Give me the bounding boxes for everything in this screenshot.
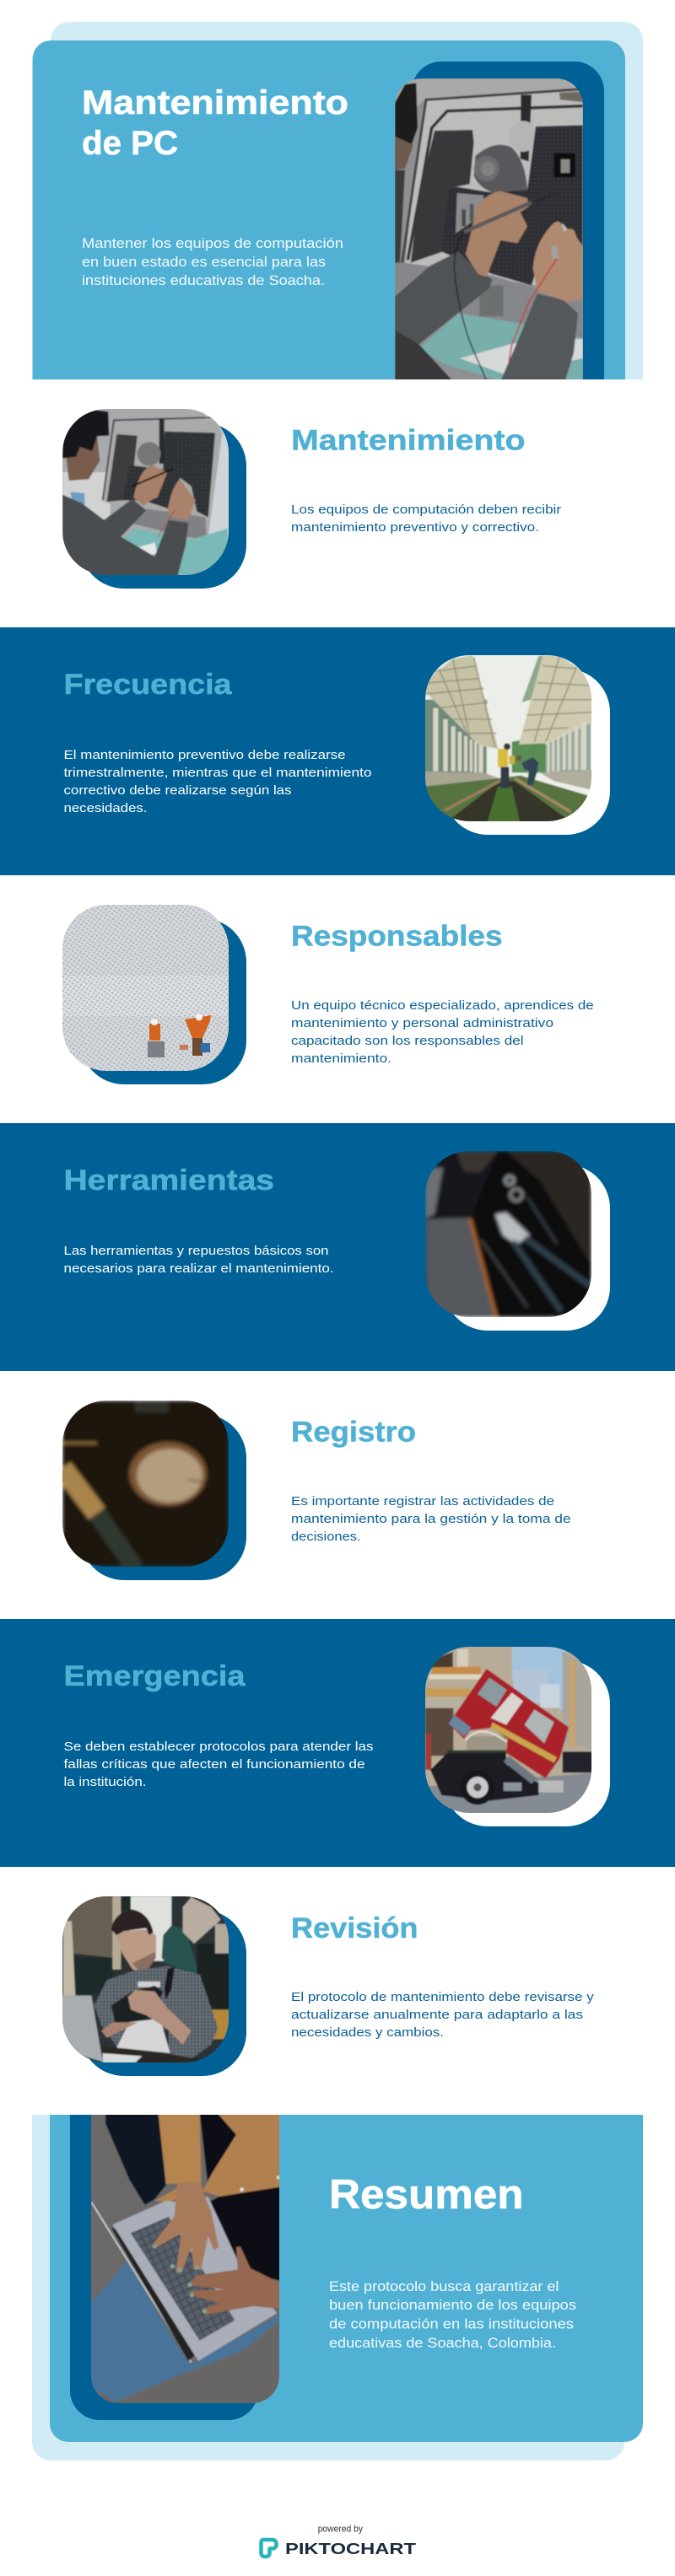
body text: actualizarse anualmente para adaptarlo a las <box>291 2008 583 2022</box>
panel: resumen <box>32 2112 643 2460</box>
footer: powered by Piktochart <box>262 2525 417 2557</box>
panel: herramientas <box>64 1151 610 1331</box>
body text: mantenimiento. <box>291 1051 392 1066</box>
panel: emergencia <box>64 1643 610 1826</box>
body text: Este protocolo busca garantizar el <box>329 2279 559 2294</box>
body text <box>291 998 594 1066</box>
wordmark: PIKTOCHART <box>285 2540 417 2557</box>
hero intro text: en buen estado es esencial para las <box>82 255 326 270</box>
body text: la institución. <box>64 1775 147 1789</box>
body text <box>291 503 561 535</box>
body text: Un equipo técnico especializado, aprendices de <box>291 998 594 1013</box>
resumen main panel <box>50 2115 643 2442</box>
photo: workers on railway <box>422 652 597 825</box>
body text: fallas críticas que afecten el funcionamiento de <box>64 1757 365 1772</box>
hero photo: technician testing a motherboard <box>395 78 583 379</box>
photo backing <box>444 1164 610 1331</box>
heading: Herramientas <box>64 1164 274 1197</box>
body text: mantenimiento preventivo y correctivo. <box>291 520 539 535</box>
hero title: de PC <box>82 125 178 162</box>
photo backing <box>70 2115 258 2420</box>
panel: frecuencia <box>64 652 610 835</box>
body text: Es importante registrar las actividades de <box>291 1494 554 1508</box>
body text: decisiones. <box>291 1530 361 1544</box>
body text <box>64 1740 373 1789</box>
photo backing <box>80 422 246 589</box>
photo: hands typing on a laptop <box>84 2112 287 2407</box>
hero photo backing <box>412 62 604 379</box>
photo: tilted fire truck <box>422 1643 595 1816</box>
heading: Emergencia <box>64 1660 246 1692</box>
photo backing <box>444 669 610 835</box>
body text: Los equipos de computación deben recibir <box>291 503 561 517</box>
powered by label: powered by <box>318 2525 363 2535</box>
body text: necesidades y cambios. <box>291 2025 444 2040</box>
body text <box>64 748 371 815</box>
photo: man holding a camera <box>59 1893 232 2066</box>
body text: mantenimiento para la gestión y la toma de <box>291 1512 571 1526</box>
heading: Registro <box>291 1416 416 1448</box>
hero intro text: instituciones educativas de Soacha. <box>82 273 325 288</box>
heading: Frecuencia <box>64 669 233 701</box>
heading: Revisión <box>291 1912 418 1944</box>
body text <box>291 1494 571 1544</box>
body text: trimestralmente, mientras que el mantenimiento <box>64 766 371 780</box>
hero main panel <box>32 40 625 379</box>
body text <box>64 1244 334 1276</box>
photo: workers on a patterned surface <box>62 905 229 1071</box>
photo: pliers and tools <box>425 1151 591 1317</box>
body text: correctivo debe realizarse según las <box>64 783 292 798</box>
panel: responsables <box>62 905 594 1084</box>
body text: Las herramientas y repuestos básicos son <box>64 1244 329 1258</box>
heading: Mantenimiento <box>291 424 525 456</box>
body text <box>291 1990 594 2040</box>
panel: revision <box>59 1893 594 2076</box>
hero title <box>82 84 348 162</box>
photo backing <box>80 918 246 1084</box>
panel: hero <box>32 22 643 384</box>
hero title: Mantenimiento <box>82 84 348 121</box>
hero intro text: Mantener los equipos de computación <box>82 236 343 251</box>
body text: El protocolo de mantenimiento debe revisarse y <box>291 1990 594 2004</box>
panel: mantenimiento <box>59 405 561 589</box>
photo backing <box>444 1660 610 1826</box>
body text: Se deben establecer protocolos para atender las <box>64 1740 373 1754</box>
heading: Responsables <box>291 920 503 952</box>
dark section bands <box>0 627 675 1867</box>
body text: necesidades. <box>64 801 147 815</box>
body text: El mantenimiento preventivo debe realizarse <box>64 748 346 762</box>
photo backing <box>80 1910 246 2076</box>
body text: mantenimiento y personal administrativo <box>291 1016 554 1030</box>
body text <box>329 2279 576 2351</box>
body text: educativas de Soacha, Colombia. <box>329 2336 556 2351</box>
icon: piktochart logo <box>262 2540 277 2557</box>
photo: wood slice on dark surface <box>62 1401 229 1568</box>
photo: technician at computer <box>59 405 232 578</box>
body text: capacitado son los responsables del <box>291 1034 523 1048</box>
resumen back panel <box>32 2115 624 2460</box>
heading: Resumen <box>329 2172 524 2218</box>
body text: buen funcionamiento de los equipos <box>329 2298 576 2313</box>
panel: registro <box>62 1401 571 1580</box>
body text: necesarios para realizar el mantenimiento. <box>64 1261 334 1276</box>
photo backing <box>80 1414 246 1580</box>
hero back panel <box>51 22 643 379</box>
hero intro text <box>82 236 343 288</box>
body text: de computación en las instituciones <box>329 2317 574 2332</box>
